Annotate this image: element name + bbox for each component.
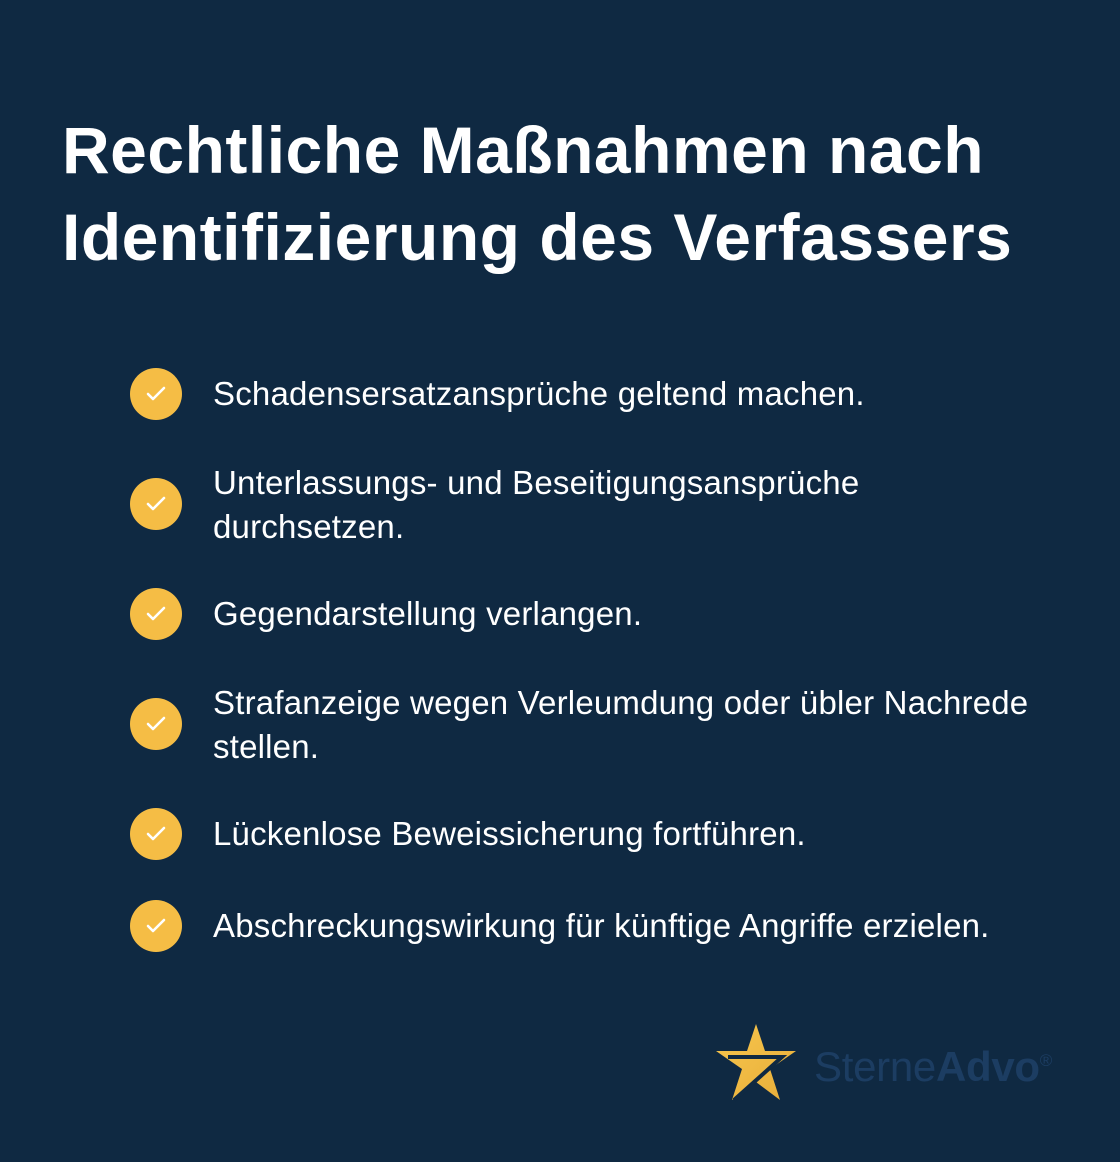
text: Lückenlose Beweissicherung fortführen.	[213, 815, 806, 852]
text: durchsetzen.	[213, 508, 404, 545]
icon: check	[130, 588, 182, 640]
text: Strafanzeige wegen Verleumdung oder übler Nachrede	[213, 684, 1028, 721]
text: Abschreckungswirkung für künftige Angriffe erzielen.	[213, 907, 990, 944]
text	[213, 464, 859, 545]
text: Unterlassungs- und Beseitigungsansprüche	[213, 464, 859, 501]
text: stellen.	[213, 728, 319, 765]
logo	[716, 1024, 1052, 1100]
text: Gegendarstellung verlangen.	[213, 595, 642, 632]
item 3	[130, 588, 642, 640]
text: Schadensersatzansprüche geltend machen.	[213, 375, 865, 412]
text	[213, 684, 1028, 765]
title	[62, 113, 1012, 274]
title: Identifizierung des Verfassers	[62, 200, 1012, 274]
brand name: SterneAdvo®	[814, 1043, 1052, 1090]
icon: check	[130, 698, 182, 750]
icon: check	[130, 478, 182, 530]
icon: check	[130, 900, 182, 952]
item 2	[130, 464, 859, 545]
icon: star	[716, 1024, 796, 1100]
title: Rechtliche Maßnahmen nach	[62, 113, 984, 187]
icon: check	[130, 368, 182, 420]
item 5	[130, 808, 806, 860]
item 1	[130, 368, 865, 420]
item 6	[130, 900, 990, 952]
item 4	[130, 684, 1028, 765]
icon: check	[130, 808, 182, 860]
